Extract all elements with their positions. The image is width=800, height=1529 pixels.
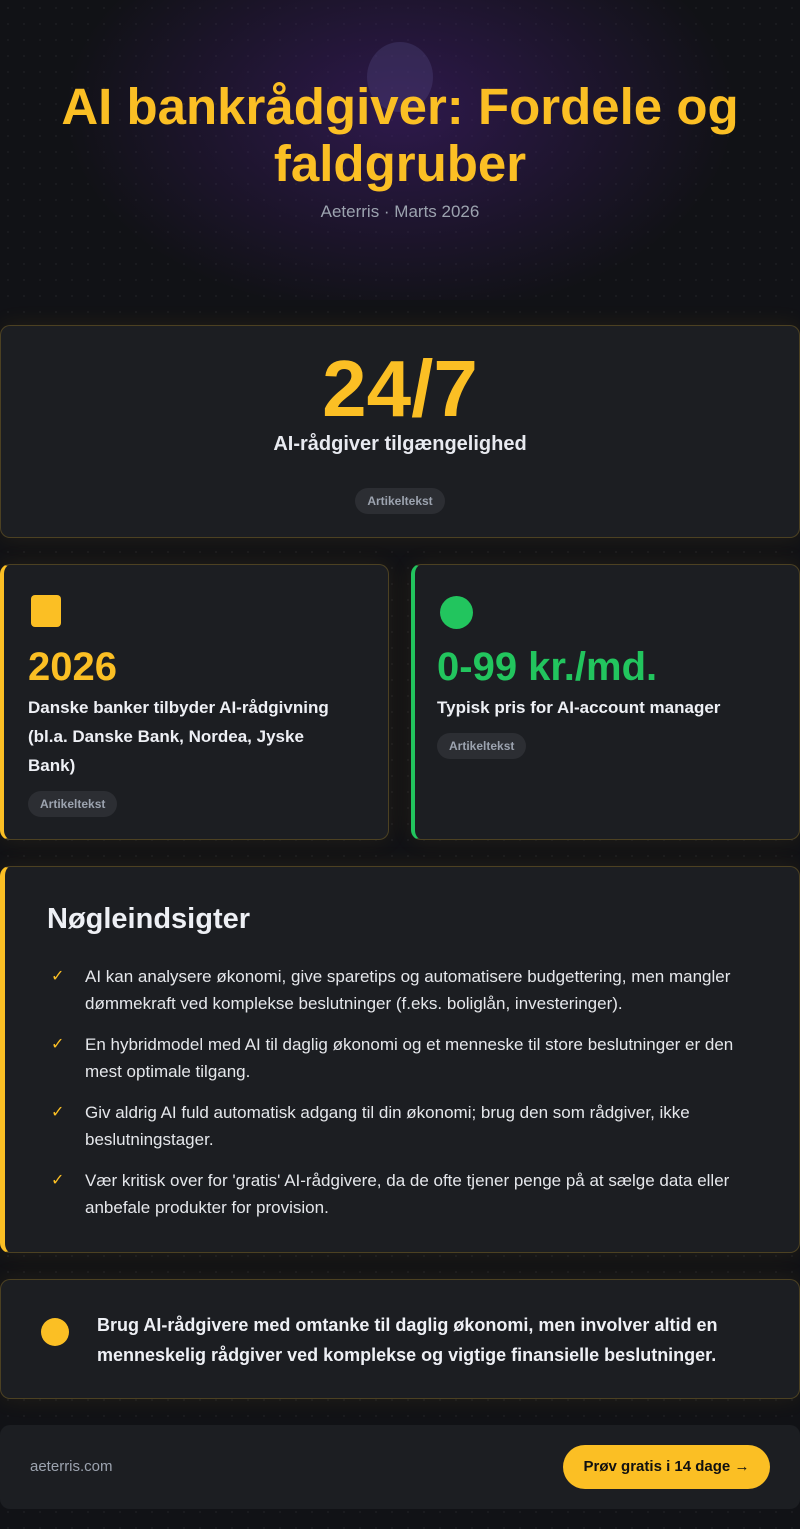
stat card: 24/7: AI-rådgiver tilgængelighed <box>273 433 527 455</box>
icon: green circle <box>440 596 473 629</box>
title: AI bankrådgiver: Fordele og faldgruber <box>61 78 739 192</box>
CTA button: Prøv gratis i 14 dage → <box>584 1458 749 1475</box>
icon: lightbulb <box>41 1318 69 1346</box>
hero header <box>0 0 800 300</box>
stat card: 2026: Artikeltekst <box>40 797 105 811</box>
stat card: 2026: Danske banker tilbyder AI-rådgivning (bl.a. Danske Bank, Nordea, Jyske Bank) <box>28 698 329 775</box>
icon: faded apple <box>367 42 433 112</box>
subtitle: Aeterris · Marts 2026 <box>321 202 479 221</box>
stat card: 2026 <box>0 564 389 840</box>
stat card: price: Typisk pris for AI-account manager <box>437 698 720 717</box>
insights list: En hybridmodel med AI til daglig økonomi og et menneske til store beslutninger er den mest optimale tilgang. <box>85 1035 733 1081</box>
insights list: Giv aldrig AI fuld automatisk adgang til din økonomi; brug den som rådgiver, ikke beslutningstager. <box>85 1103 690 1149</box>
stat card: price <box>411 564 800 840</box>
stat card: 2026: 2026 <box>28 645 117 689</box>
stat card: price: 0-99 kr./md. <box>437 645 657 689</box>
footer <box>0 1425 800 1509</box>
stat card: 24/7 <box>0 325 800 538</box>
callout: Brug AI-rådgivere med omtanke til daglig økonomi, men involver altid en menneskelig rådgiver ved komplekse og vigtige finansielle beslutninger. <box>97 1315 717 1365</box>
CTA button <box>563 1445 770 1489</box>
heading: Nøgleindsigter <box>47 903 250 935</box>
insights list: Vær kritisk over for 'gratis' AI-rådgivere, da de ofte tjener penge på at sælge data eller anbefale produkter for provision. <box>85 1171 729 1217</box>
insights list <box>53 967 733 1217</box>
icon: calendar <box>31 595 61 627</box>
callout <box>0 1279 800 1399</box>
panel: key insights <box>0 866 800 1253</box>
insights list: AI kan analysere økonomi, give sparetips og automatisere budgettering, men mangler dømmekraft ved komplekse beslutninger (f.eks. boliglån, investeringer). <box>85 967 730 1013</box>
stat card: price: Artikeltekst <box>449 739 514 753</box>
stat card: 24/7: Artikeltekst <box>367 494 433 508</box>
footer: aeterris.com <box>30 1458 113 1475</box>
stat card: 24/7: 24/7 <box>322 344 478 433</box>
